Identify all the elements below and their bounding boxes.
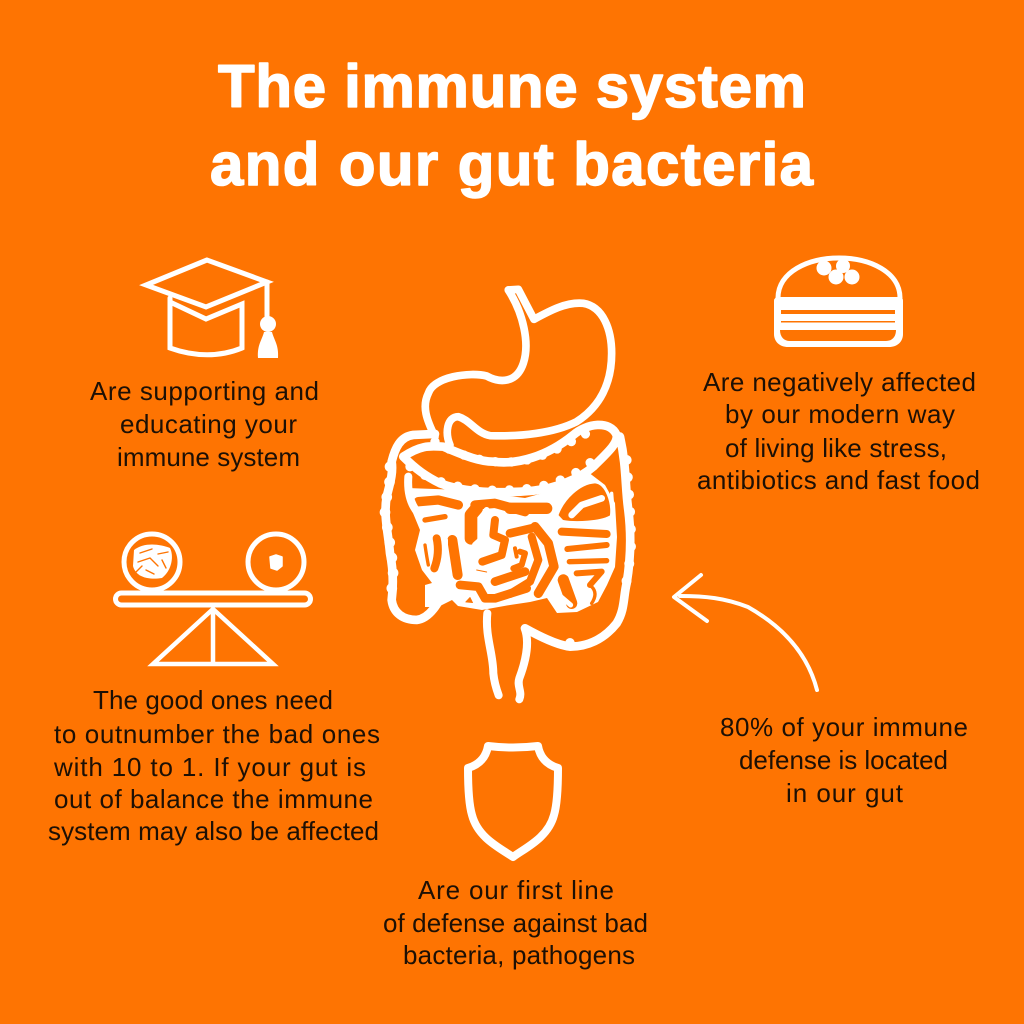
- small intestine white mass: [407, 472, 617, 613]
- text: first line of defense: bacteria, pathogens: [403, 940, 635, 970]
- text: negatively affected: Are negatively affected: [703, 367, 976, 397]
- icon: burger: [774, 258, 903, 347]
- small intestine right loops: [510, 484, 610, 603]
- arrow: curved pointer to gut: [674, 575, 817, 690]
- text: good ones outnumber: [48, 685, 380, 846]
- text: good ones outnumber: to outnumber the bad ones: [54, 719, 380, 749]
- text: negatively affected: of living like stress,: [725, 433, 947, 463]
- rectum: [487, 613, 527, 699]
- text: supporting and educating: Are supporting and: [90, 376, 319, 406]
- title: and our gut bacteria: [210, 131, 814, 198]
- text: negatively affected: antibiotics and fast food: [697, 465, 980, 495]
- icon: few bad bacteria: [270, 555, 282, 570]
- text: supporting and educating: immune system: [117, 442, 300, 472]
- small intestine left loops: [418, 500, 527, 603]
- text: 80 percent: 80% of your immune: [720, 712, 968, 742]
- icon: graduation cap: [146, 260, 278, 358]
- text: good ones outnumber: The good ones need: [93, 685, 333, 715]
- large intestine: [386, 425, 630, 647]
- colon scallop bumps: [385, 433, 631, 647]
- text: supporting and educating: educating your: [120, 409, 297, 439]
- text: negatively affected: [697, 367, 980, 495]
- text: first line of defense: Are our first line: [418, 875, 614, 905]
- text: 80 percent: in our gut: [786, 778, 904, 808]
- text: first line of defense: of defense against bad: [383, 908, 648, 938]
- text: 80 percent: defense is located: [739, 745, 948, 775]
- burger sesame seeds: [816, 259, 860, 284]
- title: The immune system: [218, 53, 806, 120]
- illustration: digestive system: [385, 289, 631, 699]
- icon: shield: [468, 746, 558, 857]
- text: 80 percent: [720, 712, 968, 808]
- stomach: [425, 289, 612, 445]
- title: [210, 53, 814, 198]
- white fingers: [445, 510, 487, 567]
- small intestine: [407, 472, 617, 613]
- text: first line of defense: [383, 875, 648, 970]
- text: supporting and educating: [90, 376, 319, 472]
- text: good ones outnumber: with 10 to 1. If your gut is: [53, 752, 366, 782]
- text: good ones outnumber: out of balance the immune: [54, 784, 373, 814]
- icon: balance scale: [116, 534, 310, 664]
- text: negatively affected: by our modern way: [725, 399, 955, 429]
- text: good ones outnumber: system may also be affected: [48, 816, 379, 846]
- icon: many good bacteria: [133, 544, 172, 579]
